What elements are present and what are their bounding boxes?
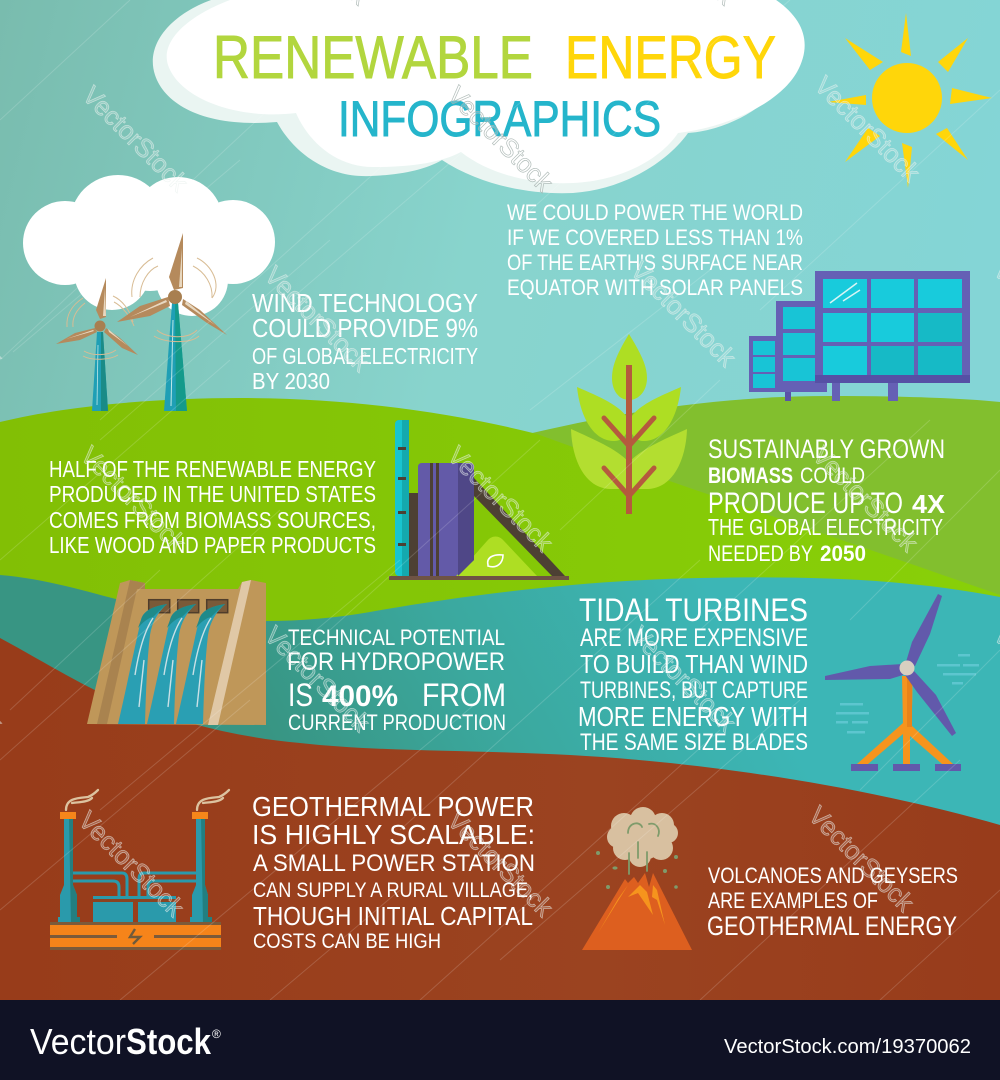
text: biomass sources: COMES FROM BIOMASS SOURCES, <box>49 507 376 533</box>
water band <box>0 575 1000 860</box>
footer logo: ® <box>212 1027 221 1041</box>
watermarks: VectorStock <box>625 255 743 373</box>
watermarks: VectorStock <box>259 260 377 378</box>
text: hydropower: IS <box>288 677 313 713</box>
back green hill <box>520 396 1000 640</box>
icon: sun <box>828 13 992 188</box>
footer logo <box>30 1021 221 1062</box>
watermarks: VectorStock <box>803 800 921 918</box>
watermarks: VectorStock <box>442 440 560 558</box>
icon: tidal turbine <box>825 594 979 771</box>
footer logo: Vector <box>30 1021 126 1062</box>
icon: small wind turbine <box>56 278 138 411</box>
text: geothermal power: CAN SUPPLY A RURAL VILLAGE, <box>253 879 533 902</box>
text: biomass sources: PRODUCED IN THE UNITED STATES <box>49 481 376 507</box>
text: biomass sources: HALF OF THE RENEWABLE ENERGY <box>49 456 376 482</box>
text: geothermal power: THOUGH INITIAL CAPITAL <box>253 901 533 931</box>
icon: biomass plant leaves <box>571 334 687 514</box>
front green hill <box>0 398 1000 660</box>
text: hydropower: TECHNICAL POTENTIAL <box>288 625 505 650</box>
text: wind technology: COULD PROVIDE 9% <box>252 313 478 343</box>
watermarks: VectorStock <box>442 80 560 198</box>
text: sustainably grown biomass: BIOMASS <box>708 463 793 488</box>
text: solar power: IF WE COVERED LESS THAN 1% <box>507 225 803 250</box>
text: biomass sources <box>49 456 376 558</box>
text: tidal turbines <box>578 592 808 756</box>
text: tidal turbines: TURBINES, BUT CAPTURE <box>580 677 808 704</box>
title cloud <box>153 0 805 193</box>
watermarks: VectorStock <box>809 70 927 188</box>
text: geothermal power: COSTS CAN BE HIGH <box>253 930 441 953</box>
text: wind technology: WIND TECHNOLOGY <box>252 288 478 318</box>
text: hydropower: CURRENT PRODUCTION <box>288 710 506 735</box>
text: geothermal power: GEOTHERMAL POWER <box>252 791 534 822</box>
text: sustainably grown biomass: 4X <box>912 489 946 519</box>
text: sustainably grown biomass: SUSTAINABLY GROWN <box>708 434 945 464</box>
footer bar <box>0 1000 1000 1080</box>
text: hydropower: FOR HYDROPOWER <box>287 648 505 676</box>
text: sustainably grown biomass: COULD <box>800 463 865 488</box>
text: tidal turbines: MORE ENERGY WITH <box>578 701 808 732</box>
watermarks: VectorStock <box>77 80 195 198</box>
text: solar power: WE COULD POWER THE WORLD <box>507 200 803 225</box>
icon: volcano <box>582 807 692 950</box>
title: ENERGY <box>565 24 776 91</box>
watermarks: VectorStock <box>73 805 191 923</box>
text: volcanoes and geysers: ARE EXAMPLES OF <box>708 888 878 913</box>
title <box>213 24 776 147</box>
text: hydropower: 400% <box>322 680 398 713</box>
icon: biomass plant <box>389 420 569 580</box>
text: tidal turbines: TIDAL TURBINES <box>579 592 808 628</box>
text: tidal turbines: TO BUILD THAN WIND <box>580 649 808 679</box>
title: INFOGRAPHICS <box>338 91 661 147</box>
text: sustainably grown biomass: PRODUCE UP TO <box>708 487 903 520</box>
watermarks: VectorStock <box>259 620 377 738</box>
text: sustainably grown biomass <box>708 434 946 566</box>
text: geothermal power: A SMALL POWER STATION <box>253 850 535 877</box>
footer image id: VectorStock.com/19370062 <box>724 1036 971 1058</box>
text: tidal turbines: ARE MORE EXPENSIVE <box>580 624 808 652</box>
title: RENEWABLE <box>213 24 533 91</box>
icon: solar panels <box>749 271 970 401</box>
text: wind technology: OF GLOBAL ELECTRICITY <box>252 343 478 369</box>
text: solar power <box>507 200 803 300</box>
text: sustainably grown biomass: NEEDED BY <box>708 541 813 566</box>
watermarks: VectorStock <box>625 620 743 738</box>
text: geothermal power: IS HIGHLY SCALABLE: <box>252 819 535 850</box>
text: sustainably grown biomass: THE GLOBAL ELECTRICITY <box>708 514 943 540</box>
text: volcanoes and geysers <box>707 863 958 941</box>
earth band <box>0 638 1000 1000</box>
watermarks: VectorStock <box>75 440 193 558</box>
footer logo: Stock <box>126 1021 212 1062</box>
text: sustainably grown biomass: 2050 <box>820 541 866 566</box>
text: wind technology: BY 2030 <box>252 368 330 394</box>
text: hydropower <box>287 625 506 735</box>
text: hydropower: FROM <box>422 677 506 713</box>
text: geothermal power <box>252 791 535 953</box>
icon: geothermal plant <box>50 790 229 950</box>
wind cloud <box>23 175 275 316</box>
text: solar power: OF THE EARTH'S SURFACE NEAR <box>507 250 803 275</box>
text: tidal turbines: THE SAME SIZE BLADES <box>580 729 808 756</box>
text: solar power: EQUATOR WITH SOLAR PANELS <box>507 275 803 300</box>
icon: large wind turbine <box>117 233 227 411</box>
text: biomass sources: LIKE WOOD AND PAPER PRODUCTS <box>49 532 376 558</box>
text: volcanoes and geysers: VOLCANOES AND GEYSERS <box>708 863 958 888</box>
icon: hydro dam <box>87 580 266 725</box>
watermarks: VectorStock <box>442 805 560 923</box>
watermarks: VectorStock <box>807 440 925 558</box>
text: wind technology <box>252 288 478 394</box>
